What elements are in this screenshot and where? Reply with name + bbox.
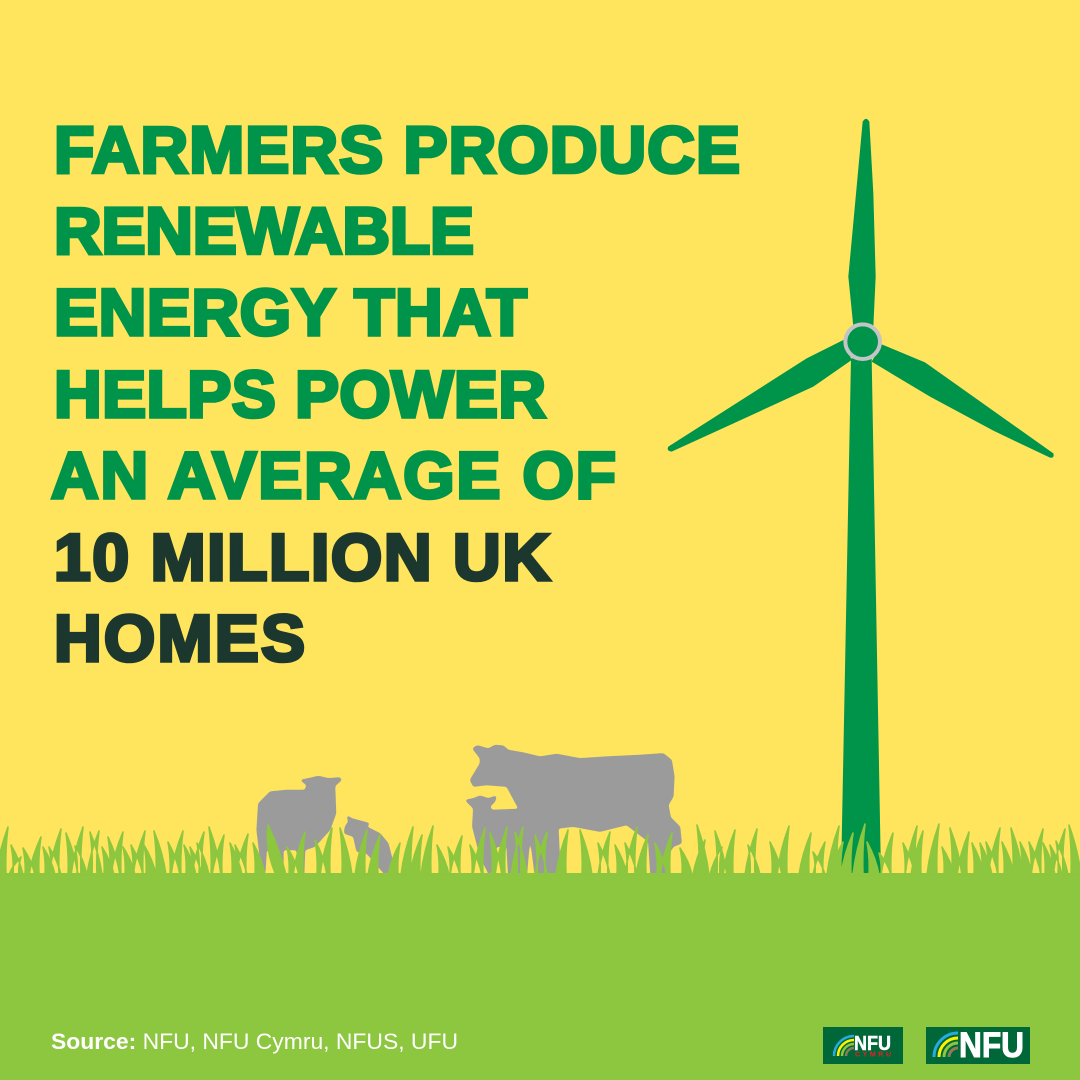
logo: NFU Cymru: NFU <box>854 1033 891 1055</box>
icon: lamb <box>344 815 393 877</box>
icon: calf <box>465 796 530 877</box>
title line: green part: HELPS POWER <box>54 357 546 431</box>
title line: green part: RENEWABLE <box>54 194 474 268</box>
logo: NFU Cymru: CYMRU <box>855 1052 891 1058</box>
icon: animals <box>257 745 682 877</box>
icon: wind turbine <box>668 119 1054 877</box>
title line: green part: FARMERS PRODUCE <box>54 112 740 186</box>
title line: green part <box>51 112 740 512</box>
title line: dark highlight: HOMES <box>54 601 305 675</box>
title line: green part: ENERGY THAT <box>54 275 527 349</box>
icon: cow <box>470 745 682 877</box>
title line: dark highlight: 10 MILLION UK <box>54 520 550 594</box>
title <box>51 112 740 675</box>
title line: green part: AN AVERAGE OF <box>51 438 616 512</box>
grass blades <box>0 824 1080 875</box>
title line: dark highlight <box>54 520 550 675</box>
source note: Source: NFU, NFU Cymru, NFUS, UFU <box>51 1029 458 1054</box>
icon: adult sheep <box>257 776 342 877</box>
logo: NFU: NFU <box>959 1026 1024 1065</box>
grass <box>0 824 1080 1080</box>
logo: NFU <box>926 1026 1030 1065</box>
ground <box>0 873 1080 1080</box>
logo: NFU Cymru <box>823 1027 903 1064</box>
